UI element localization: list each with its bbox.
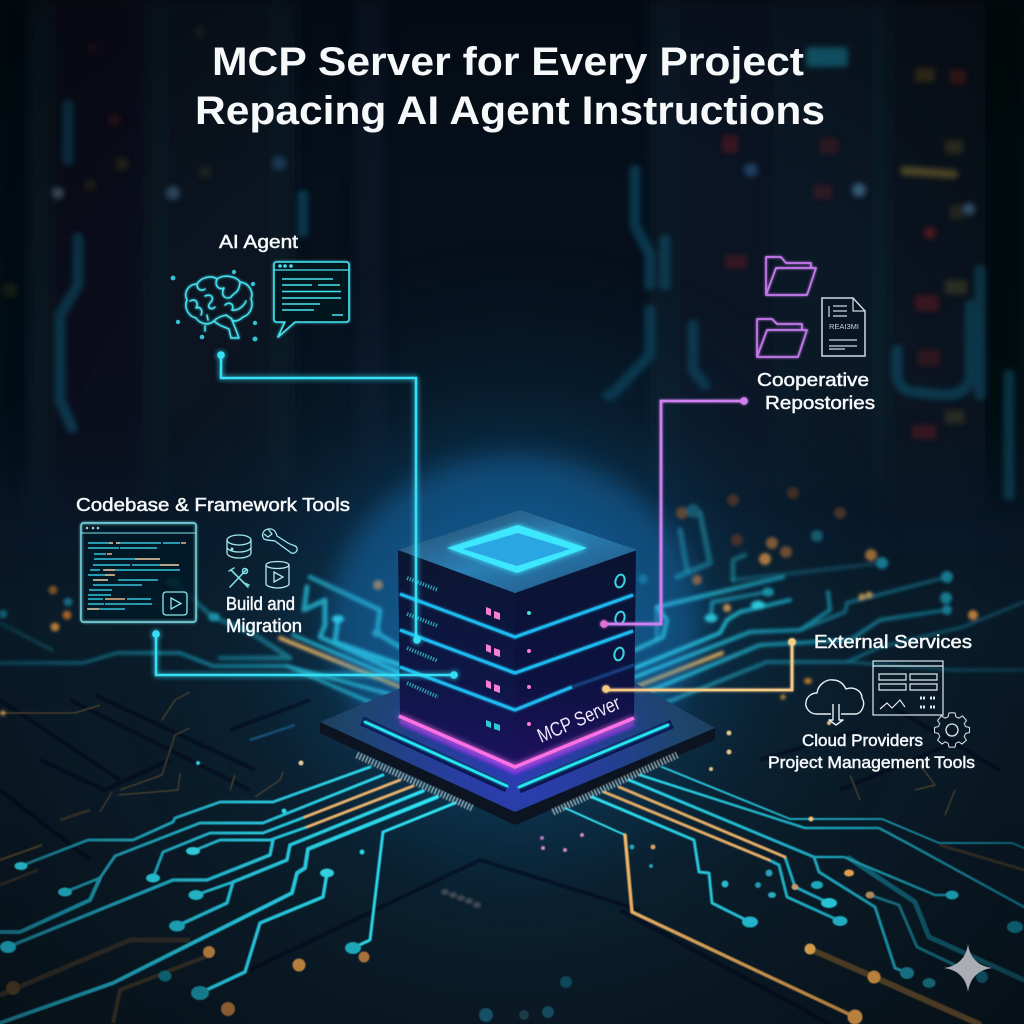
plate neon edges [365,722,668,787]
title [195,40,825,133]
upper right circuit dots [638,487,978,700]
text: Build and Migration: Build and [226,594,295,614]
text: Cloud Providers and Project Management Tools: Cloud Providers [802,731,923,750]
panel: External Services [768,632,975,772]
lower right circuit dots [519,721,1023,1024]
connector: external services to server [602,638,796,693]
icon: wrench [263,529,297,553]
heading: AI Agent: AI Agent [219,232,298,252]
circuit traces: upper left [0,577,400,716]
icon: database with play [266,562,289,588]
icon: README document: REAI3MI [829,322,859,331]
play button [163,592,187,615]
thin orange relief traces [0,692,955,815]
icon: brain [186,276,252,338]
text: Cooperative Repostories: Repostories [765,393,875,413]
vent marks [407,578,438,697]
magenta under-glow [400,722,634,772]
server label: MCP Server [534,692,624,748]
text: Cooperative Repostories [757,370,875,413]
icon: gear [935,713,969,747]
heading: External Services: External Services [814,632,972,652]
icon: chat window [274,262,349,337]
neon top square [447,525,587,573]
panel: Cooperative Repositories [757,257,875,413]
icon: dashboard window [873,661,943,715]
chip base plate [320,680,715,825]
dark board relief [0,695,1000,1024]
icon: crossed tools [229,568,249,587]
watermark sparkle [944,944,992,992]
panel: Codebase and Framework Tools [76,495,350,636]
circuit traces: lower left [0,760,493,1023]
text: Cooperative Repostories: Cooperative [757,370,869,390]
status lights [486,574,626,731]
brain sparkle dots [171,270,258,342]
blurred silver chip row [441,889,481,908]
circuit traces: upper right [635,487,1024,705]
upper left circuit dots [0,577,383,716]
title: Repacing AI Agent Instructions [195,89,825,133]
connector: codebase tools to server [152,630,458,679]
text: Build and Migration [226,594,302,636]
layer neon lines [400,594,634,710]
blurred vertical conduits [60,105,1009,495]
heading: Codebase & Framework Tools: Codebase & Framework Tools [76,495,350,515]
blurred server racks [0,0,1024,520]
icon: database [227,535,251,558]
dark frame strips [362,721,672,789]
halo [330,455,700,785]
circuit traces: lower right [441,721,1024,1024]
text: Build and Migration: Migration [226,616,302,636]
icon: README document [822,298,865,356]
blurred rack lights [2,26,975,439]
icon: cloud [806,680,864,725]
connector: repositories to server [600,397,748,628]
circuit traces: dim PCB relief [0,692,1024,1024]
text: Cloud Providers and Project Management Tools [768,731,975,772]
icon: code window [81,523,196,622]
server body [398,510,637,772]
text: Cloud Providers and Project Management Tools: Project Management Tools [768,753,975,772]
panel: AI Agent [171,232,349,342]
connector: AI Agent to server [217,351,421,644]
chip pins [357,755,677,812]
MCP server stack on chip [320,455,715,825]
icon: folders [757,257,816,357]
lower left circuit dots [0,760,493,1022]
magenta base light [399,716,634,767]
title: MCP Server for Every Project [212,40,804,84]
